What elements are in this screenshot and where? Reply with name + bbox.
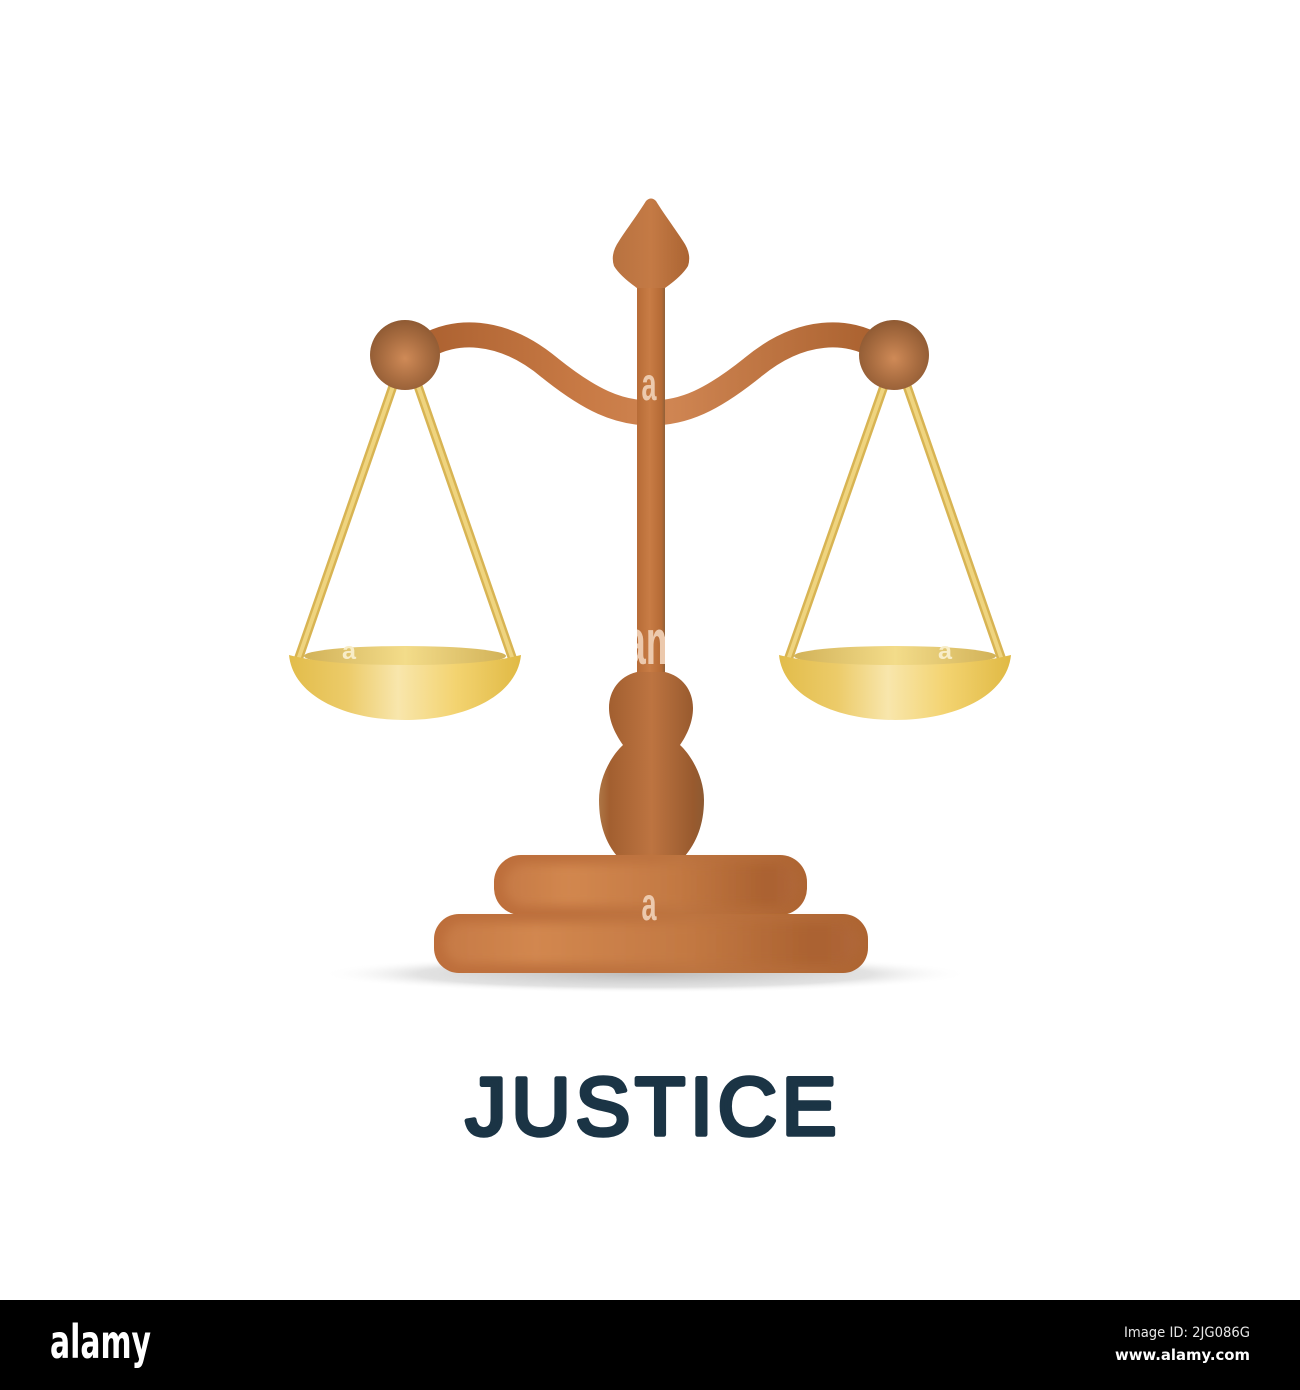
central pole: [637, 280, 665, 680]
ground shadow: [320, 955, 970, 993]
curved beam: [425, 335, 877, 413]
watermark marks: a: [642, 878, 657, 930]
website: www.alamy.com: [1115, 1346, 1250, 1364]
left ball: [370, 320, 440, 390]
right pan: [779, 646, 1011, 720]
watermark marks: a: [342, 638, 357, 665]
left pan: [289, 646, 521, 720]
footer bar: [0, 1300, 1300, 1390]
image id: Image ID: 2JG086G: [1124, 1325, 1250, 1341]
footer logo: alamy: [50, 1315, 151, 1369]
icon: scales of justice: [289, 198, 1011, 973]
title: JUSTICE: [466, 1062, 836, 1152]
arrowhead finial: [613, 198, 689, 288]
right hanging rods: [788, 386, 1002, 660]
right ball: [859, 320, 929, 390]
watermark marks: a: [642, 358, 657, 410]
lower base step: [434, 914, 868, 973]
turned knob: [599, 672, 704, 856]
watermark marks: am: [625, 606, 679, 678]
watermark marks: [342, 358, 953, 930]
left hanging rods: [298, 386, 513, 660]
upper base step: [494, 855, 807, 915]
watermark marks: a: [938, 638, 953, 665]
